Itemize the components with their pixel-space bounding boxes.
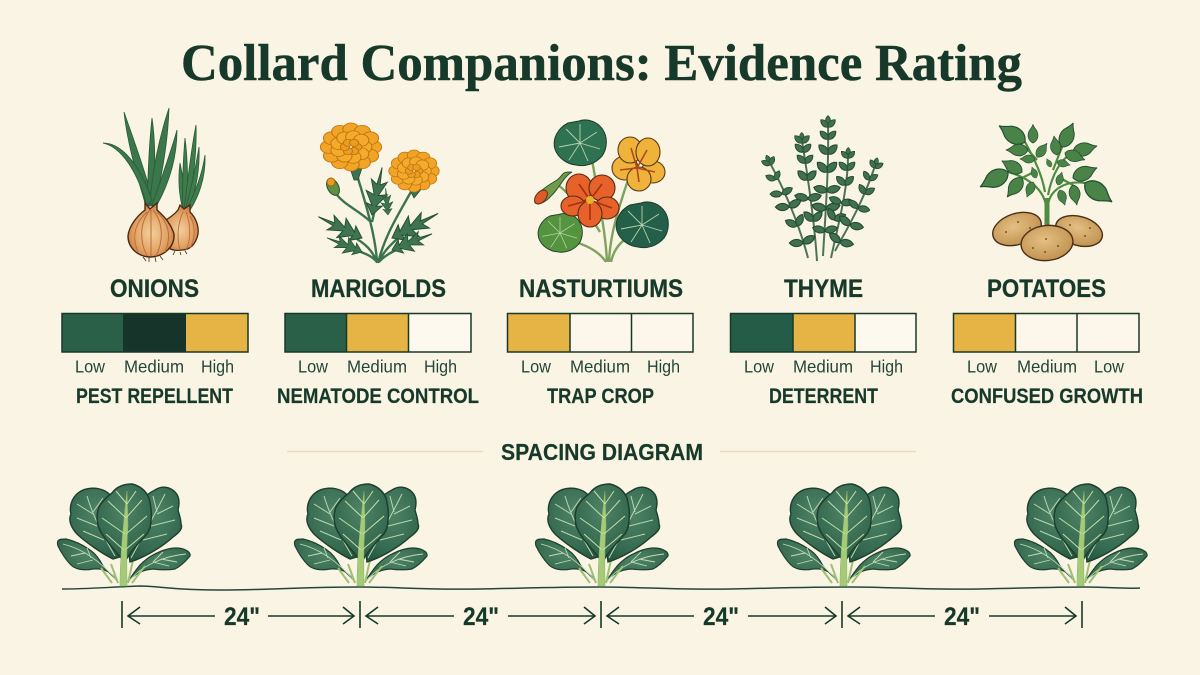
panel: marigolds <box>277 123 479 408</box>
label: nasturtiums: NASTURTIUMS <box>519 275 683 303</box>
dimension: spacing 1: 24" <box>224 603 260 631</box>
icon: collard 4 <box>777 484 910 586</box>
scale labels: thyme: Low <box>744 356 774 376</box>
benefit: marigolds: NEMATODE CONTROL <box>277 385 479 408</box>
dimension: spacing 2: 24" <box>463 603 499 631</box>
benefit: thyme: DETERRENT <box>769 385 878 408</box>
icon: marigolds <box>314 123 444 263</box>
rating bar: onions <box>62 314 248 352</box>
scale labels: thyme: Medium <box>793 356 853 376</box>
icon: onions <box>103 108 205 262</box>
title: Collard Companions: Evidence Rating <box>181 35 1022 92</box>
scale labels: potatoes: Low <box>1094 356 1124 376</box>
scale labels: marigolds: Medium <box>347 356 407 376</box>
scale labels: marigolds <box>298 356 457 376</box>
dimension: spacing 2 <box>366 601 601 631</box>
dimension: spacing 4 <box>848 601 1082 631</box>
scale labels: potatoes: Medium <box>1017 356 1077 376</box>
heading: spacing diagram: SPACING DIAGRAM <box>501 439 703 465</box>
panel: nasturtiums <box>507 120 693 408</box>
scale labels: marigolds: Low <box>298 356 328 376</box>
rating bar: potatoes <box>953 313 1139 352</box>
label: onions: ONIONS <box>110 275 199 303</box>
scale labels: nasturtiums: High <box>647 356 680 376</box>
icon: collard 1 <box>57 484 190 586</box>
dimension: spacing 3: 24" <box>703 603 739 631</box>
soil line <box>62 586 1140 590</box>
label: thyme: THYME <box>784 275 863 303</box>
dimension: spacing 4: 24" <box>944 603 980 631</box>
scale labels: thyme: High <box>870 356 903 376</box>
scale labels: nasturtiums <box>521 356 680 376</box>
dimension: spacing 3 <box>607 601 842 631</box>
rating bar: thyme <box>730 313 916 352</box>
panel: potatoes <box>951 119 1143 408</box>
label: marigolds: MARIGOLDS <box>311 275 446 303</box>
scale labels: onions: Low <box>75 356 105 376</box>
icon: collard 3 <box>535 484 668 586</box>
scale labels: potatoes: Low <box>967 356 997 376</box>
spacing diagram: collard row <box>57 484 1147 590</box>
panel: thyme <box>730 116 916 408</box>
scale labels: onions: Medium <box>124 356 184 376</box>
rating bar: nasturtiums <box>507 313 693 352</box>
scale labels: onions <box>75 356 234 376</box>
benefit: potatoes: CONFUSED GROWTH <box>951 385 1143 408</box>
icon: potatoes <box>976 119 1117 263</box>
label: potatoes: POTATOES <box>987 275 1106 303</box>
icon: collard 5 <box>1014 484 1147 586</box>
benefit: onions: PEST REPELLENT <box>76 385 233 408</box>
dimension: spacing 1 <box>122 601 360 631</box>
benefit: nasturtiums: TRAP CROP <box>547 385 654 408</box>
panel: onions <box>62 108 248 408</box>
scale labels: potatoes <box>967 356 1124 376</box>
scale labels: onions: High <box>201 356 234 376</box>
icon: collard 2 <box>294 484 427 586</box>
scale labels: nasturtiums: Medium <box>570 356 630 376</box>
icon: thyme <box>759 116 885 261</box>
scale labels: marigolds: High <box>424 356 457 376</box>
rating bar: marigolds <box>285 313 471 352</box>
scale labels: thyme <box>744 356 903 376</box>
icon: nasturtiums <box>532 120 668 262</box>
scale labels: nasturtiums: Low <box>521 356 551 376</box>
